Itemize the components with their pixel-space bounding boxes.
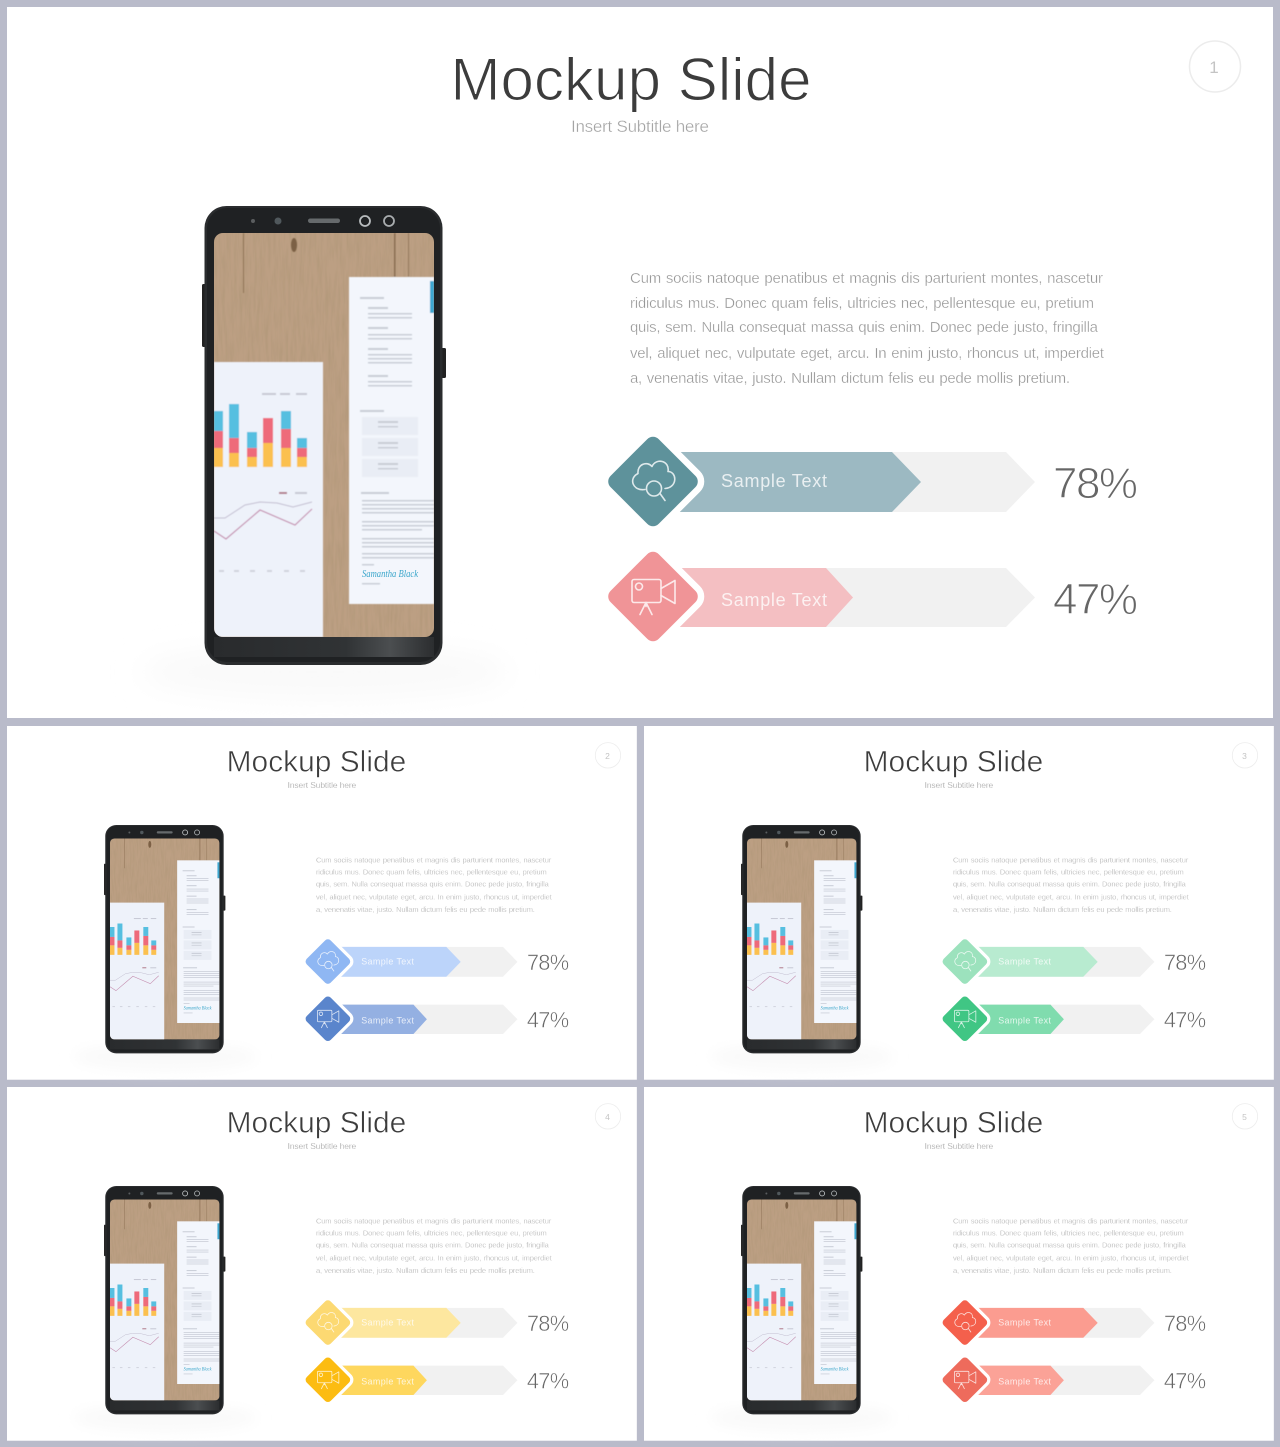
body text — [316, 855, 553, 914]
slide 1 panel — [7, 7, 1273, 718]
body text: a, venenatis vitae, justo. Nullam dictum felis eu pede mollis pretium. — [630, 370, 1070, 387]
progress row 78%: Sample Text — [361, 1317, 414, 1327]
page number badge: 4 — [605, 1112, 610, 1122]
phone mockup — [710, 1186, 894, 1431]
body text: quis, sem. Nulla consequat massa quis enim. Donec pede justo, fringilla — [316, 880, 550, 889]
body text: quis, sem. Nulla consequat massa quis enim. Donec pede justo, fringilla — [953, 1241, 1187, 1250]
progress row 47% — [941, 995, 1206, 1043]
progress row 47% — [941, 1356, 1206, 1404]
subtitle: Insert Subtitle here — [288, 780, 357, 790]
body text: quis, sem. Nulla consequat massa quis enim. Donec pede justo, fringilla — [630, 319, 1099, 336]
page number badge — [1232, 1104, 1258, 1129]
page number badge: 5 — [1242, 1112, 1247, 1122]
body text: a, venenatis vitae, justo. Nullam dictum felis eu pede mollis pretium. — [316, 905, 535, 914]
slide 2 panel — [7, 726, 637, 1080]
progress row 47%: Sample Text — [998, 1377, 1051, 1387]
page number badge — [595, 743, 621, 768]
progress row 78%: Sample Text — [998, 956, 1051, 966]
title: Mockup Slide — [227, 745, 406, 778]
progress row 47% — [304, 995, 569, 1043]
page number badge — [1232, 743, 1258, 768]
progress row 47%: 47% — [527, 1007, 569, 1032]
body text: ridiculus mus. Donec quam felis, ultricies nec, pellentesque eu, pretium — [316, 868, 547, 877]
title: Mockup Slide — [450, 46, 812, 113]
subtitle: Insert Subtitle here — [571, 117, 709, 136]
page number badge — [1190, 41, 1240, 92]
progress row 78% — [941, 1299, 1206, 1346]
body text: vel, aliquet nec, vulputate eget, arcu. In enim justo, rhoncus ut, imperdiet — [316, 1254, 553, 1263]
progress row 47%: Sample Text — [361, 1016, 414, 1026]
page number badge — [595, 1104, 621, 1129]
body text: Cum sociis natoque penatibus et magnis dis parturient montes, nascetur — [953, 855, 1189, 864]
slide 4 panel — [7, 1087, 637, 1441]
phone mockup — [73, 825, 257, 1070]
progress row 78%: Sample Text — [721, 471, 827, 491]
progress row 47% — [304, 1356, 569, 1404]
progress row 47%: 47% — [1053, 575, 1138, 624]
page number badge: 3 — [1242, 751, 1247, 761]
body text: ridiculus mus. Donec quam felis, ultricies nec, pellentesque eu, pretium — [953, 868, 1184, 877]
body text: Cum sociis natoque penatibus et magnis dis parturient montes, nascetur — [630, 270, 1103, 287]
body text: vel, aliquet nec, vulputate eget, arcu. In enim justo, rhoncus ut, imperdiet — [953, 1254, 1190, 1263]
progress row 78% — [304, 938, 569, 985]
subtitle: Insert Subtitle here — [925, 780, 994, 790]
progress row 47%: Sample Text — [721, 590, 827, 610]
progress row 78%: 78% — [1164, 950, 1206, 975]
body text — [316, 1216, 553, 1275]
subtitle: Insert Subtitle here — [288, 1141, 357, 1151]
progress row 47%: 47% — [527, 1368, 569, 1393]
body text: ridiculus mus. Donec quam felis, ultricies nec, pellentesque eu, pretium — [953, 1229, 1184, 1238]
progress row 47%: 47% — [1164, 1007, 1206, 1032]
slide 5 panel — [644, 1087, 1274, 1441]
body text: a, venenatis vitae, justo. Nullam dictum felis eu pede mollis pretium. — [953, 1266, 1172, 1275]
page number badge: 2 — [605, 751, 610, 761]
body text: Cum sociis natoque penatibus et magnis dis parturient montes, nascetur — [316, 855, 552, 864]
subtitle: Insert Subtitle here — [925, 1141, 994, 1151]
progress row 47%: 47% — [1164, 1368, 1206, 1393]
title: Mockup Slide — [227, 1106, 406, 1139]
title: Mockup Slide — [864, 745, 1043, 778]
progress row 78% — [605, 433, 1138, 530]
progress row 78%: 78% — [527, 950, 569, 975]
body text: Cum sociis natoque penatibus et magnis dis parturient montes, nascetur — [316, 1216, 552, 1225]
progress row 47%: Sample Text — [361, 1377, 414, 1387]
progress row 47%: Sample Text — [998, 1016, 1051, 1026]
progress row 78%: 78% — [1053, 459, 1138, 508]
progress row 78%: Sample Text — [998, 1317, 1051, 1327]
slide 3 panel — [644, 726, 1274, 1080]
body text: vel, aliquet nec, vulputate eget, arcu. In enim justo, rhoncus ut, imperdiet — [953, 893, 1190, 902]
body text: quis, sem. Nulla consequat massa quis enim. Donec pede justo, fringilla — [953, 880, 1187, 889]
progress row 47% — [605, 548, 1138, 645]
progress row 78%: Sample Text — [361, 956, 414, 966]
phone mockup — [710, 825, 894, 1070]
phone mockup — [73, 1186, 257, 1431]
title: Mockup Slide — [864, 1106, 1043, 1139]
body text: a, venenatis vitae, justo. Nullam dictum felis eu pede mollis pretium. — [316, 1266, 535, 1275]
body text — [953, 1216, 1190, 1275]
body text: vel, aliquet nec, vulputate eget, arcu. In enim justo, rhoncus ut, imperdiet — [630, 345, 1105, 362]
body text — [953, 855, 1190, 914]
body text: Cum sociis natoque penatibus et magnis dis parturient montes, nascetur — [953, 1216, 1189, 1225]
phone mockup — [140, 206, 510, 698]
body text: a, venenatis vitae, justo. Nullam dictum felis eu pede mollis pretium. — [953, 905, 1172, 914]
progress row 78%: 78% — [1164, 1311, 1206, 1336]
body text: ridiculus mus. Donec quam felis, ultricies nec, pellentesque eu, pretium — [316, 1229, 547, 1238]
progress row 78% — [941, 938, 1206, 985]
body text: ridiculus mus. Donec quam felis, ultricies nec, pellentesque eu, pretium — [630, 295, 1094, 312]
body text: vel, aliquet nec, vulputate eget, arcu. In enim justo, rhoncus ut, imperdiet — [316, 893, 553, 902]
body text: quis, sem. Nulla consequat massa quis enim. Donec pede justo, fringilla — [316, 1241, 550, 1250]
body text — [630, 270, 1105, 387]
progress row 78% — [304, 1299, 569, 1346]
page number badge: 1 — [1209, 58, 1219, 77]
progress row 78%: 78% — [527, 1311, 569, 1336]
